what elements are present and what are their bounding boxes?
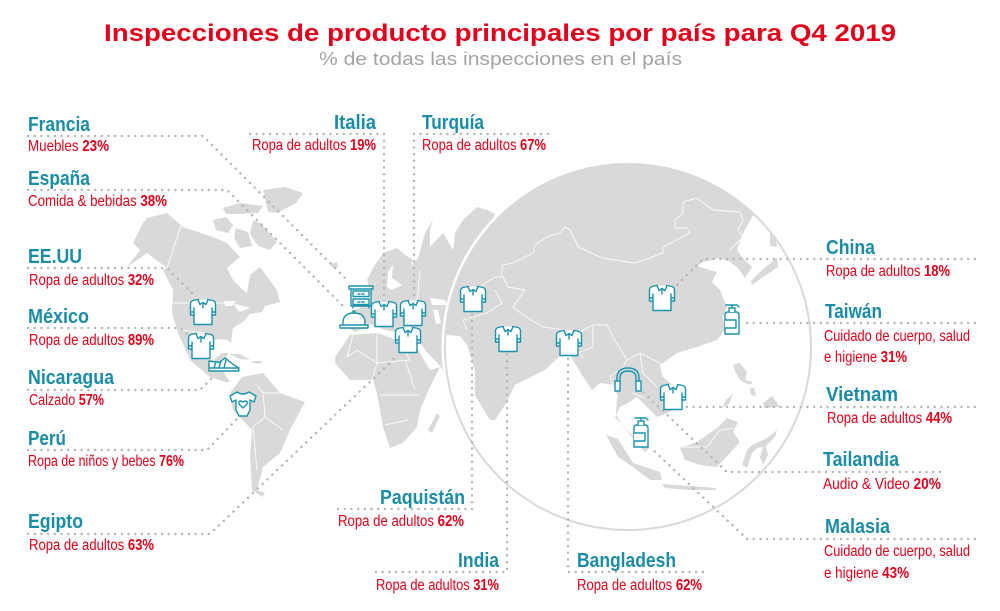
dotted leader: Italia <box>250 134 384 302</box>
label: Malasia: Malasia <box>825 516 891 538</box>
country borders outside <box>167 223 420 470</box>
globe outline <box>445 164 811 530</box>
country borders inside <box>463 198 743 447</box>
icon: bottle Taiwán <box>725 305 739 334</box>
label: Bangladesh: Ropa de adultos 62% <box>577 577 702 594</box>
label: EE.UU: EE.UU <box>28 246 82 268</box>
label: España: Comida & bebidas 38% <box>28 193 167 210</box>
icon: bottle Malasia <box>634 418 648 447</box>
label: Tailandia: Tailandia <box>823 449 900 471</box>
label: Bangladesh <box>577 550 702 594</box>
icon: shirt Paquistán <box>460 286 486 312</box>
label: Taiwán: Cuidado de cuerpo, salud <box>824 328 970 345</box>
label: Turquía: Turquía <box>422 112 485 134</box>
icon: shirt México <box>188 334 214 358</box>
label: EE.UU <box>28 246 154 289</box>
title: Inspecciones de producto principales por país para Q4 2019 <box>104 20 896 47</box>
icon: headphones Tailandia <box>615 368 641 391</box>
land outside the globe <box>127 187 495 497</box>
dotted leader: Taiwán <box>745 322 975 324</box>
label: Francia: Francia <box>28 114 91 136</box>
icon: shirt Turquía <box>400 300 426 326</box>
icon: food cloche España <box>340 311 368 328</box>
label: México: México <box>28 306 89 328</box>
label: Francia: Muebles 23% <box>28 138 109 155</box>
dotted leader: Tailandia <box>643 392 940 472</box>
label: Nicaragua <box>28 367 115 409</box>
label: Egipto: Ropa de adultos 63% <box>29 537 154 554</box>
dotted leader: Vietnam <box>685 406 975 408</box>
label: España <box>28 168 167 210</box>
white ring around globe <box>442 160 814 534</box>
world map <box>127 150 814 534</box>
dotted leader: Francia <box>28 136 347 280</box>
dotted leader: México <box>28 328 188 335</box>
label: Paquistán: Paquistán <box>380 487 465 509</box>
label: Malasia: e higiene 43% <box>824 565 909 582</box>
land inside the globe <box>430 150 780 490</box>
icon: shirt EE.UU <box>190 300 216 324</box>
dotted leader: España <box>28 190 343 306</box>
label: Nicaragua: Nicaragua <box>28 367 115 389</box>
label: Taiwán: e higiene 31% <box>824 349 907 366</box>
label: México: Ropa de adultos 89% <box>29 332 154 349</box>
icon: shirt China <box>650 286 674 310</box>
label: China: Ropa de adultos 18% <box>826 263 950 280</box>
label: Malasia: Cuidado de cuerpo, salud <box>824 543 970 560</box>
dotted leader: Nicaragua <box>28 376 214 390</box>
label: India: Ropa de adultos 31% <box>376 577 499 594</box>
label: Vietnam: Ropa de adultos 44% <box>827 410 952 427</box>
label: México <box>28 306 154 349</box>
label: Taiwán <box>824 301 970 366</box>
label: Malasia <box>824 516 970 582</box>
label: Vietnam <box>826 384 952 427</box>
icon: shirt Italia <box>372 302 396 326</box>
label: Taiwán: Taiwán <box>825 301 882 323</box>
label: Turquía: Ropa de adultos 67% <box>422 137 546 154</box>
label: India: India <box>458 550 500 572</box>
dotted leader: Perú <box>28 419 237 450</box>
label: Tailandia: Audio & Video 20% <box>823 476 941 493</box>
label: Bangladesh: Bangladesh <box>577 550 676 572</box>
label: Egipto: Egipto <box>28 511 83 533</box>
icon: onesie Perú <box>230 392 256 416</box>
label: China <box>826 237 950 280</box>
dotted leader: EE.UU <box>28 268 192 293</box>
label: Perú <box>28 428 184 470</box>
icon: shoe Nicaragua <box>209 358 239 371</box>
label: Italia: Italia <box>334 112 377 134</box>
dotted leader: Paquistán <box>338 312 472 509</box>
icon: shirt India <box>496 326 520 352</box>
label: Vietnam: Vietnam <box>826 384 898 406</box>
label: EE.UU: Ropa de adultos 32% <box>29 272 154 289</box>
dotted leader: India <box>376 352 507 572</box>
label: Tailandia <box>823 449 941 493</box>
icon: furniture Francia <box>349 286 373 308</box>
label: Paquistán <box>338 487 465 530</box>
icon: shirt Vietnam <box>660 384 686 410</box>
icon: shirt Egipto <box>396 328 420 352</box>
label: Italia <box>252 112 377 154</box>
subtitle: % de todas las inspecciones en el país <box>319 49 682 69</box>
dotted leader: China <box>677 259 975 285</box>
label: India <box>376 550 500 594</box>
label: Perú: Perú <box>28 428 66 450</box>
label: España: España <box>28 168 91 190</box>
icon: shirt Bangladesh <box>556 330 582 356</box>
dotted leader: Egipto <box>28 356 397 534</box>
label: Paquistán: Ropa de adultos 62% <box>338 513 464 530</box>
dotted leader: Turquía <box>414 134 548 300</box>
label: Francia <box>28 114 109 155</box>
label: Turquía <box>422 112 546 154</box>
dotted leader: Bangladesh <box>568 356 703 572</box>
label: Nicaragua: Calzado 57% <box>29 392 104 409</box>
label: Italia: Ropa de adultos 19% <box>252 137 376 154</box>
label: Perú: Ropa de niños y bebes 76% <box>28 453 184 470</box>
dotted leader: Malasia <box>650 447 975 539</box>
label: China: China <box>826 237 876 259</box>
label: Egipto <box>28 511 154 554</box>
